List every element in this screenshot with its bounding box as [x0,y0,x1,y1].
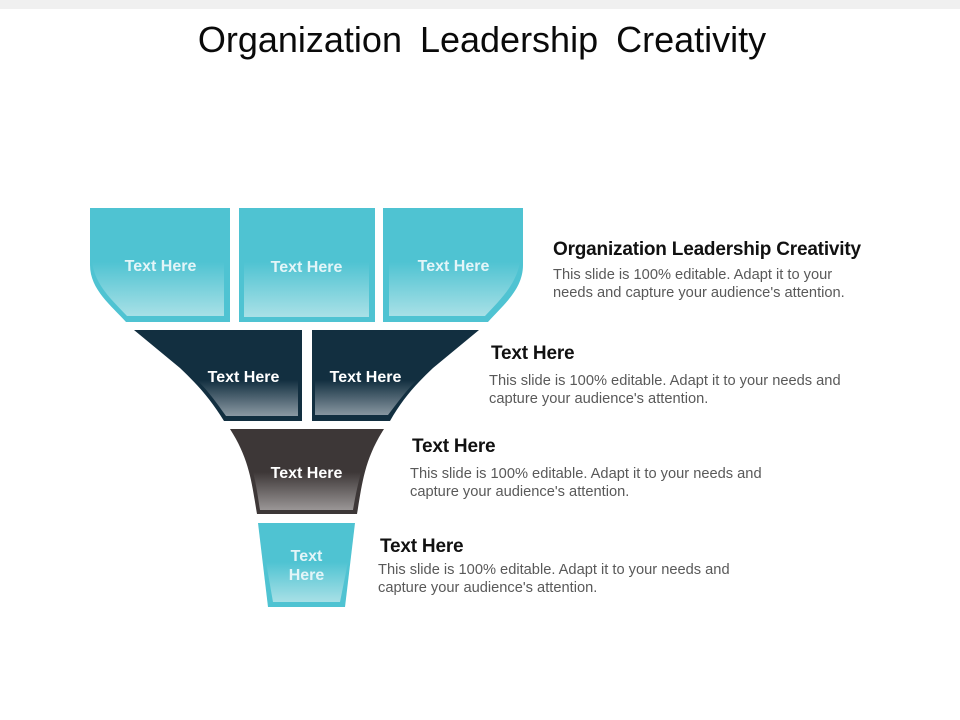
text block: tier 2: Text Here [491,343,574,364]
text block: tier 3 [410,436,762,500]
text block: tier 4 [378,536,730,596]
text block: tier 3: capture your audience's attention. [410,484,629,500]
tier 1 left segment [90,208,230,322]
text block: tier 3: This slide is 100% editable. Adapt it to your needs and [410,466,762,482]
tier 2 left segment: Text Here [208,369,279,386]
tier 3 segment [230,429,384,514]
tier 2 right segment: Text Here [330,369,401,386]
tier 1 right segment: Text Here [418,258,489,275]
text block: tier 3: Text Here [412,436,495,457]
tier 4 segment [258,523,355,607]
text block: organization leadership creativity: This slide is 100% editable. Adapt it to your [553,267,832,283]
title: Organization Leadership Creativity [198,19,766,60]
text block: tier 2: capture your audience's attention. [489,391,708,407]
text block: organization leadership creativity: needs and capture your audience's attention. [553,285,845,301]
tier 1 right segment [383,208,523,322]
text block: tier 2 [489,343,841,407]
tier 1 middle segment: Text Here [271,259,342,276]
text block: tier 2: This slide is 100% editable. Adapt it to your needs and [489,373,841,389]
text block: tier 4: capture your audience's attention. [378,580,597,596]
tier 2 right segment [312,330,479,421]
text block: tier 4: Text Here [380,536,463,557]
tier 1 left segment: Text Here [125,258,196,275]
tier 4 segment: Text [291,548,323,565]
tier 3 segment: Text Here [271,465,342,482]
tier 4 segment: Here [289,567,324,584]
funnel diagram [90,208,523,607]
text block: organization leadership creativity: Organization Leadership Creativity [553,239,861,260]
tier 2 left segment [134,330,302,421]
tier 1 middle segment [239,208,375,322]
text block: organization leadership creativity [553,239,861,301]
text block: tier 4: This slide is 100% editable. Adapt it to your needs and [378,562,730,578]
